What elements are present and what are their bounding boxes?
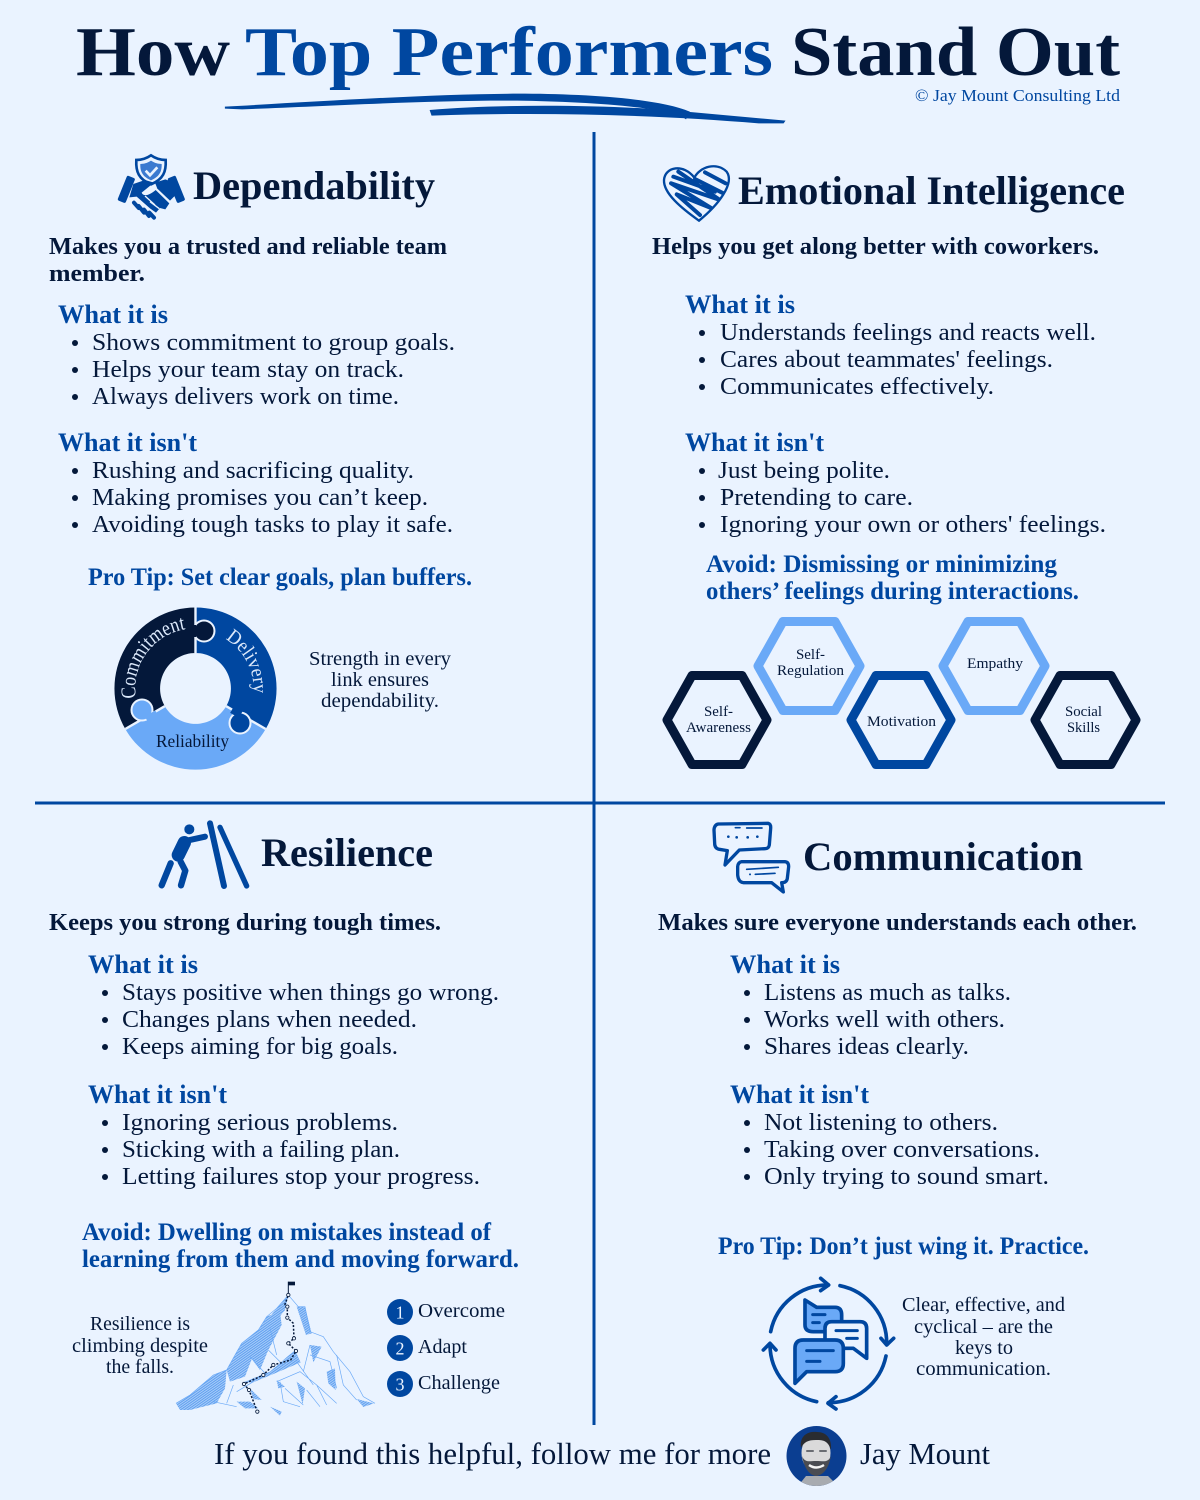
what it is	[58, 300, 455, 410]
caption	[309, 648, 451, 712]
hexagon chain: Skills	[1067, 720, 1100, 736]
what it is	[730, 950, 1011, 1060]
what it is: What it is	[88, 950, 198, 979]
call to action: If you found this helpful, follow me for more	[214, 1436, 771, 1471]
panel: resilience	[49, 823, 519, 1416]
what it is: Shares ideas clearly.	[764, 1034, 969, 1060]
panel: dependability	[49, 154, 472, 770]
hexagon chain: Social	[1065, 704, 1102, 720]
what it is: Always delivers work on time.	[92, 384, 399, 410]
hexagon chain: Empathy	[967, 656, 1024, 672]
intro	[49, 234, 447, 287]
caption: the falls.	[106, 1356, 174, 1378]
caption: Clear, effective, and	[902, 1294, 1065, 1316]
what it isn't: What it isn't	[685, 428, 824, 457]
portrait	[786, 1426, 846, 1486]
footer	[214, 1426, 990, 1486]
caption: Resilience is	[90, 1313, 190, 1335]
caption: link ensures	[331, 669, 429, 691]
caption: communication.	[916, 1358, 1051, 1380]
what it isn't: Ignoring serious problems.	[122, 1110, 398, 1136]
what it is: Shows commitment to group goals.	[92, 330, 455, 356]
what it is: Listens as much as talks.	[764, 980, 1011, 1006]
what it isn't: Rushing and sacrificing quality.	[92, 458, 414, 484]
what it isn't: What it isn't	[88, 1080, 227, 1109]
what it isn't: What it isn't	[730, 1080, 869, 1109]
title: Top Performers	[245, 14, 773, 91]
numbered list: 3	[396, 1374, 404, 1394]
what it is	[685, 290, 1096, 400]
what it is: Stays positive when things go wrong.	[122, 980, 499, 1006]
avoid note	[82, 1219, 519, 1273]
what it is: Cares about teammates' feelings.	[720, 347, 1053, 373]
puzzle ring chart: Delivery	[226, 628, 263, 693]
what it isn't: Pretending to care.	[720, 485, 913, 511]
what it isn't: Letting failures stop your progress.	[122, 1164, 480, 1190]
intro: Makes you a trusted and reliable team	[49, 234, 447, 260]
what it isn't: Just being polite.	[718, 458, 890, 484]
what it is: Keeps aiming for big goals.	[122, 1034, 398, 1060]
numbered list: Challenge	[418, 1372, 500, 1394]
icon: scribbled heart	[664, 166, 729, 221]
pro tip: Pro Tip: Don’t just wing it. Practice.	[718, 1233, 1089, 1260]
avoid note	[706, 551, 1079, 605]
hexagon chain: Awareness	[686, 720, 751, 736]
puzzle ring chart	[114, 608, 277, 770]
what it isn't: Making promises you can’t keep.	[92, 485, 428, 511]
icon: communication cycle	[763, 1278, 894, 1409]
copyright: © Jay Mount Consulting Ltd	[915, 86, 1121, 105]
what it isn't	[88, 1080, 480, 1190]
numbered list: 2	[396, 1338, 404, 1358]
what it isn't	[730, 1080, 1049, 1190]
panel: communication	[658, 823, 1137, 1409]
hexagon chain	[667, 622, 1136, 764]
icon: speech bubbles	[714, 823, 789, 892]
what it isn't: Ignoring your own or others' feelings.	[720, 512, 1106, 538]
avoid note: Avoid: Dwelling on mistakes instead of	[82, 1219, 492, 1246]
what it is: What it is	[730, 950, 840, 979]
caption: dependability.	[321, 690, 439, 712]
what it is: Changes plans when needed.	[122, 1007, 417, 1033]
what it is	[88, 950, 499, 1060]
caption: keys to	[955, 1337, 1013, 1359]
intro: member.	[49, 261, 145, 287]
title: Stand Out	[791, 14, 1120, 91]
name: Jay Mount	[860, 1436, 990, 1471]
what it is: Understands feelings and reacts well.	[720, 320, 1096, 346]
what it isn't: Taking over conversations.	[764, 1137, 1040, 1163]
caption: climbing despite	[72, 1335, 208, 1357]
numbered list: 1	[396, 1302, 404, 1322]
hexagon chain: Regulation	[777, 663, 845, 679]
avoid note: others’ feelings during interactions.	[706, 578, 1079, 605]
what it isn't	[685, 428, 1106, 538]
avoid note: learning from them and moving forward.	[82, 1246, 519, 1273]
puzzle ring chart: Reliability	[156, 731, 229, 751]
numbered list	[387, 1299, 505, 1397]
intro: Keeps you strong during tough times.	[49, 910, 441, 936]
hexagon chain: Self-	[704, 704, 733, 720]
what it isn't: Only trying to sound smart.	[764, 1164, 1049, 1190]
numbered list: Overcome	[418, 1300, 505, 1322]
intro: Helps you get along better with coworkers.	[652, 234, 1099, 260]
caption	[902, 1294, 1065, 1380]
caption	[72, 1313, 208, 1378]
hexagon chain: Self-	[796, 647, 825, 663]
what it is: What it is	[58, 300, 168, 329]
mountain illustration	[176, 1282, 375, 1416]
numbered list: Adapt	[418, 1336, 467, 1358]
heading: Emotional Intelligence	[738, 168, 1125, 213]
panel: emotional intelligence	[652, 166, 1136, 764]
icon: person pushing	[162, 823, 247, 886]
what it is: Helps your team stay on track.	[92, 357, 404, 383]
title: How	[76, 14, 230, 91]
what it is: What it is	[685, 290, 795, 319]
intro: Makes sure everyone understands each other.	[658, 910, 1137, 936]
pro tip: Pro Tip: Set clear goals, plan buffers.	[88, 564, 472, 591]
heading: Communication	[803, 834, 1083, 879]
title	[76, 14, 1120, 91]
heading: Resilience	[261, 830, 433, 875]
title underline stroke	[225, 94, 786, 123]
hexagon chain: Motivation	[867, 714, 937, 730]
avoid note: Avoid: Dismissing or minimizing	[706, 551, 1057, 578]
what it isn't: Sticking with a failing plan.	[122, 1137, 400, 1163]
heading: Dependability	[193, 163, 435, 208]
what it isn't	[58, 428, 453, 538]
what it is: Communicates effectively.	[720, 374, 994, 400]
caption: cyclical – are the	[914, 1316, 1053, 1338]
caption: Strength in every	[309, 648, 451, 670]
what it isn't: What it isn't	[58, 428, 197, 457]
what it isn't: Not listening to others.	[764, 1110, 998, 1136]
icon: handshake with shield	[117, 155, 185, 218]
what it is: Works well with others.	[764, 1007, 1005, 1033]
puzzle ring chart: Commitment	[121, 618, 186, 698]
what it isn't: Avoiding tough tasks to play it safe.	[92, 512, 453, 538]
